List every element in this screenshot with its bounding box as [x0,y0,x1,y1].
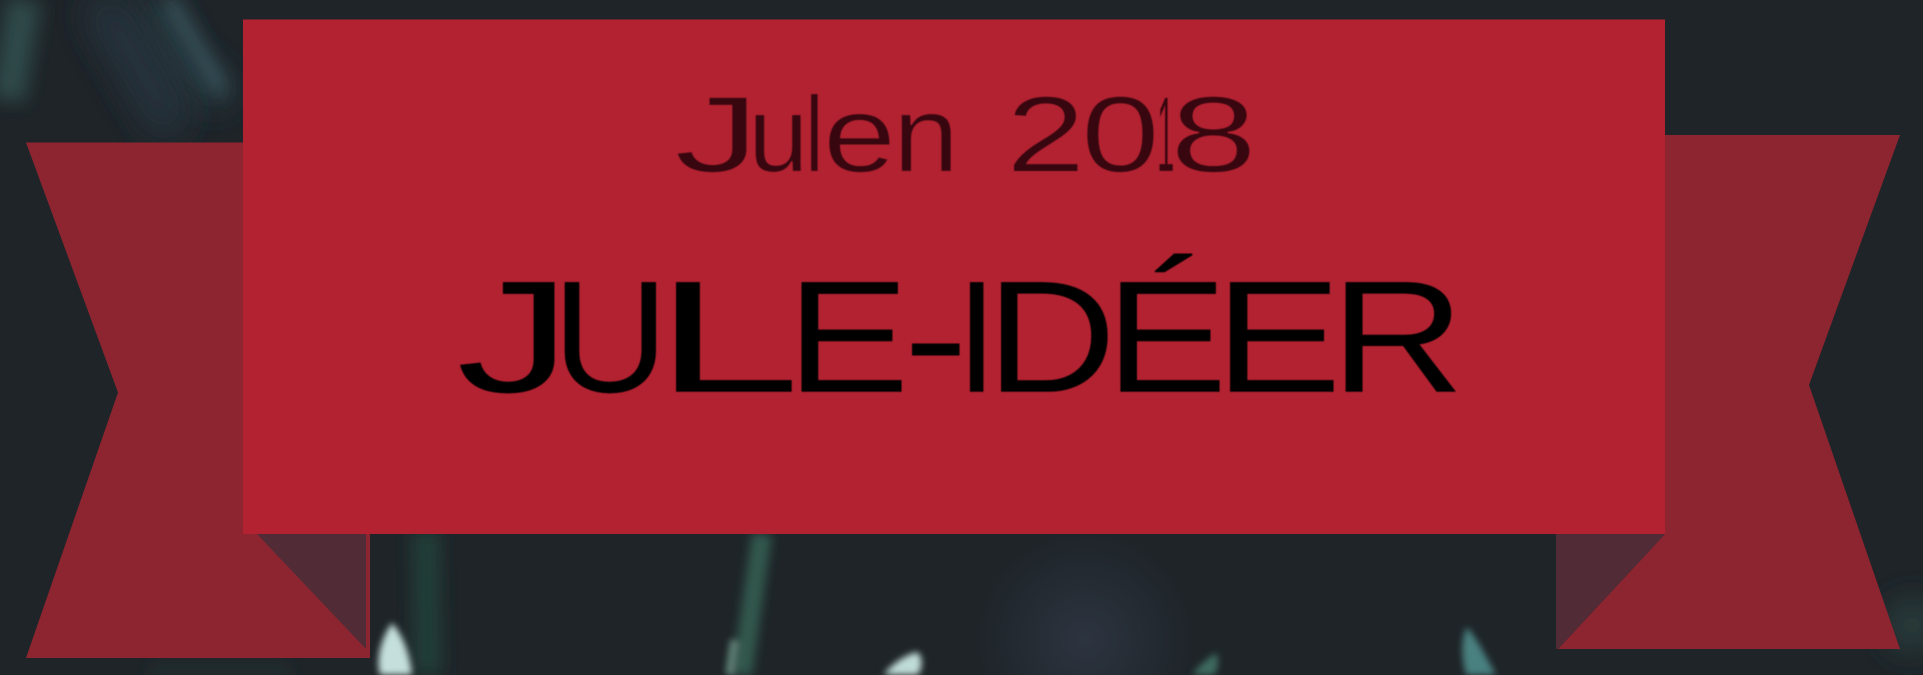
title text block: l [805,75,824,195]
title text block: 2 [1006,75,1085,195]
title text block: R [1330,247,1465,426]
title text block: n [893,75,959,195]
title text block: e [823,75,896,195]
heading: JULE-IDÉER [456,247,1465,426]
title text block: I [956,247,997,426]
title text block: 1 [1157,75,1175,195]
title text block: 8 [1170,75,1257,195]
title text block: D [986,247,1117,426]
title text block: U [552,247,669,426]
right fold [1556,534,1665,649]
title text block: u [748,75,809,195]
title text block: L [654,247,801,426]
right ribbon tail [1558,135,1900,649]
title text block: E [1214,247,1342,426]
left fold [257,534,366,649]
main red panel [243,20,1665,534]
subtitle: Julen 2018 [674,75,1257,195]
left ribbon tail [26,142,370,658]
title text block: E [786,247,910,426]
title text block: - [903,247,969,426]
title text block: J [674,75,760,195]
title text block: J [456,247,572,426]
title text block: 0 [1081,75,1160,195]
title text block: É [1105,247,1228,426]
